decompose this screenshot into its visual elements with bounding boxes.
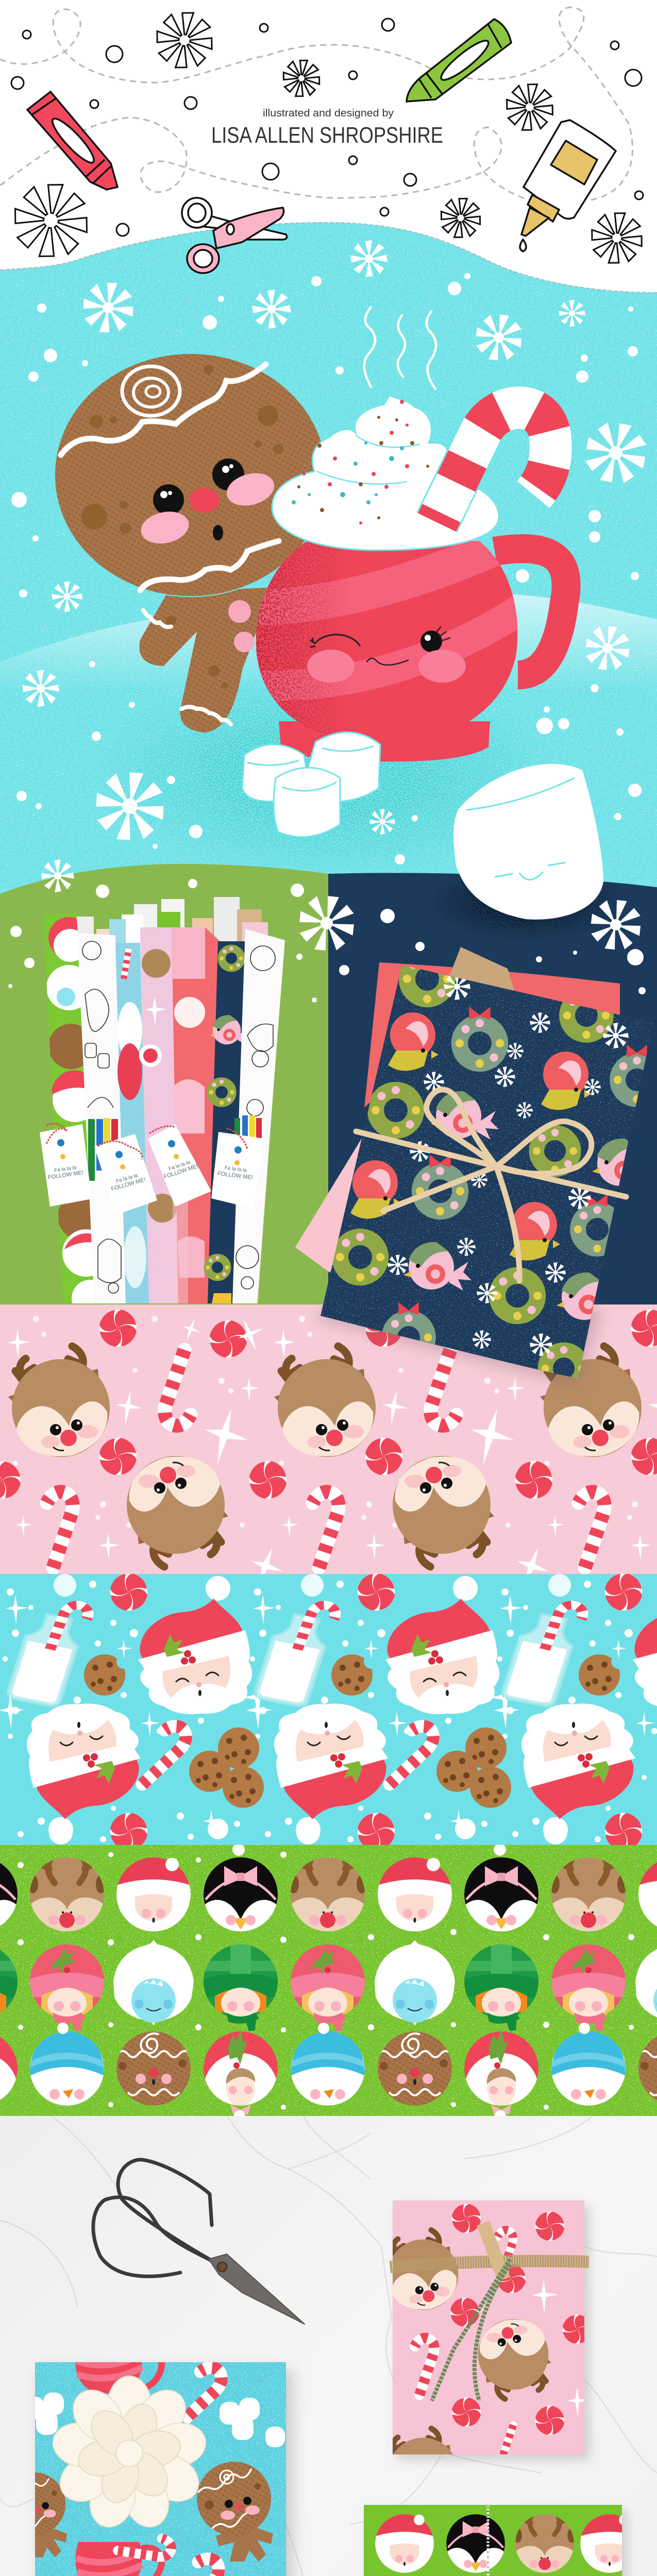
roll: coral [172, 927, 222, 1303]
gift: coral paper behind [364, 962, 620, 1108]
ribbon bow [356, 1090, 626, 1281]
panel: teal Santa pattern [0, 1573, 657, 1850]
panel: green character circles pattern [0, 1843, 657, 2125]
pattern tile 3 [494, 1573, 657, 1850]
icon: glue bottle [520, 120, 616, 251]
gift tags with follow message: Fa la la la [224, 1165, 247, 1174]
panel: wrapping paper rolls photo [40, 897, 285, 1317]
credit line: illustrated and designed by [263, 108, 394, 119]
crayon bundles [88, 1115, 262, 1181]
icon: red crayon [27, 92, 117, 190]
gift tags with follow message: Fa la la la [115, 1173, 139, 1184]
gift tags with follow message: FOLLOW ME! [110, 1177, 146, 1192]
gift: green with baker's twine [364, 2505, 642, 2576]
gift tags with follow message [40, 1124, 264, 1215]
roll: green [43, 913, 94, 1303]
panel: marble flat lay [0, 2116, 657, 2576]
reindeer peeking out [448, 947, 515, 994]
roll: white colouring page [77, 933, 126, 1303]
wave edge of the teal scene [0, 223, 657, 293]
back rolls [75, 897, 283, 1303]
roll: lilac [139, 927, 178, 1303]
character: gingerbread man [55, 353, 327, 733]
gift tags with follow message: Fa la la la [168, 1160, 191, 1172]
outlined snowflakes [9, 8, 646, 267]
topping: candy cane in mug [437, 408, 551, 522]
panel: header decorations [0, 7, 646, 273]
roll: navy [206, 941, 251, 1303]
group: three marshmallows [242, 732, 380, 837]
reindeer faces [8, 1346, 642, 1567]
panel: green and navy split background [0, 850, 657, 1306]
spray below mug [93, 670, 557, 876]
gift bow [49, 2376, 209, 2533]
gift: pink with clothespin and twine [385, 2200, 592, 2508]
character: big smiling marshmallow [453, 764, 603, 920]
designer name: LISA ALLEN SHROPSHIRE [211, 123, 443, 148]
snow hill [0, 594, 657, 896]
shadow of gift [314, 1278, 603, 1386]
steam squiggles [364, 307, 436, 389]
panel: teal hero scene [0, 222, 657, 920]
falling snow dots [11, 273, 642, 865]
roll: light blue [115, 943, 149, 1303]
topping: whipped cream with sprinkles [272, 395, 499, 550]
panel: pink reindeer pattern [0, 1304, 657, 1595]
speckle texture [0, 222, 657, 896]
pattern tile 1 [0, 1573, 275, 1850]
gift tags with follow message: FOLLOW ME! [48, 1170, 84, 1181]
gift: pink paper behind [295, 1127, 392, 1273]
dashed path lines [0, 7, 632, 201]
icon: green crayon [407, 19, 511, 101]
character: red cocoa mug [247, 531, 566, 761]
gift: teal with white bow [3, 2345, 293, 2576]
gift tags with follow message: Fa la la la [54, 1165, 77, 1174]
pattern tile 2 [246, 1573, 523, 1850]
gift tags with follow message: FOLLOW ME! [217, 1171, 253, 1181]
white snowflakes [22, 240, 655, 892]
panel: wrapped navy gift with birds and wreaths [295, 947, 657, 1391]
row 3 faces [0, 2023, 657, 2125]
row 2 faces [0, 1940, 657, 2031]
vintage scissors [93, 2160, 305, 2324]
roll: white with outlines [232, 929, 285, 1303]
row 1 faces [0, 1857, 657, 1931]
icon: scissors [182, 198, 287, 273]
gift tags with follow message: FOLLOW ME! [163, 1163, 199, 1180]
outlined snow circles [11, 19, 643, 236]
